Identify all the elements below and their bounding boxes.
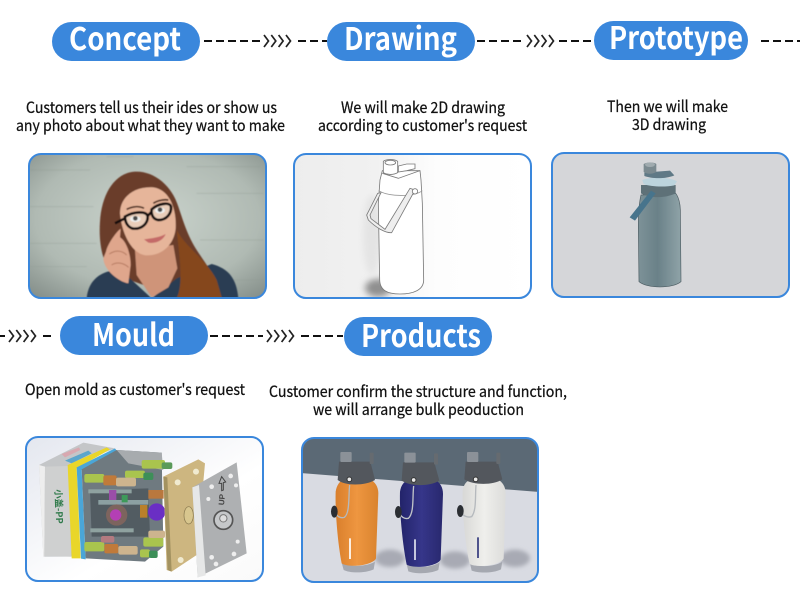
panel: exploded mould CAD view: UP <box>217 493 227 506</box>
connector: into Mould <box>0 330 54 342</box>
panel: woman thinking photo <box>28 153 267 299</box>
heading: Concept: Concept <box>69 14 181 59</box>
text: prototype description <box>607 95 728 135</box>
heading: Products: Products <box>361 311 481 356</box>
white bottle <box>457 452 506 573</box>
heading: Mould <box>60 310 208 355</box>
heading: Mould: Mould <box>92 310 175 355</box>
panel: 3D bottle render <box>552 153 789 297</box>
text: mould description: Open mold as customer's request <box>25 378 245 400</box>
navy bottle <box>395 453 443 573</box>
text: concept description: Customers tell us their ides or show us <box>26 96 277 118</box>
panel: exploded mould CAD view: 小盖-PP <box>52 489 67 524</box>
text: drawing description <box>318 96 527 136</box>
text: products description <box>269 380 567 420</box>
text: products description: we will arrange bulk peoduction <box>313 398 524 420</box>
connector: Prototype onward <box>761 40 800 42</box>
text: products description: Customer confirm the structure and function, <box>269 380 567 402</box>
heading: Prototype: Prototype <box>609 13 743 58</box>
orange bottle <box>331 452 378 572</box>
connector: Concept to Drawing <box>204 35 327 47</box>
connector: Mould to Products <box>210 330 343 342</box>
text: prototype description: 3D drawing <box>632 113 706 135</box>
panel: 2D bottle line drawing <box>293 153 532 299</box>
text: concept description <box>16 96 285 136</box>
panel: exploded mould CAD view <box>26 437 263 581</box>
text: concept description: any photo about what they want to make <box>16 114 285 136</box>
text: drawing description: We will make 2D drawing <box>341 96 505 118</box>
panel: finished bottles photo <box>301 437 539 583</box>
connector: Drawing to Prototype <box>477 35 592 47</box>
text: drawing description: according to customer's request <box>318 114 527 136</box>
text: prototype description: Then we will make <box>607 95 728 117</box>
heading: Drawing: Drawing <box>344 14 457 59</box>
